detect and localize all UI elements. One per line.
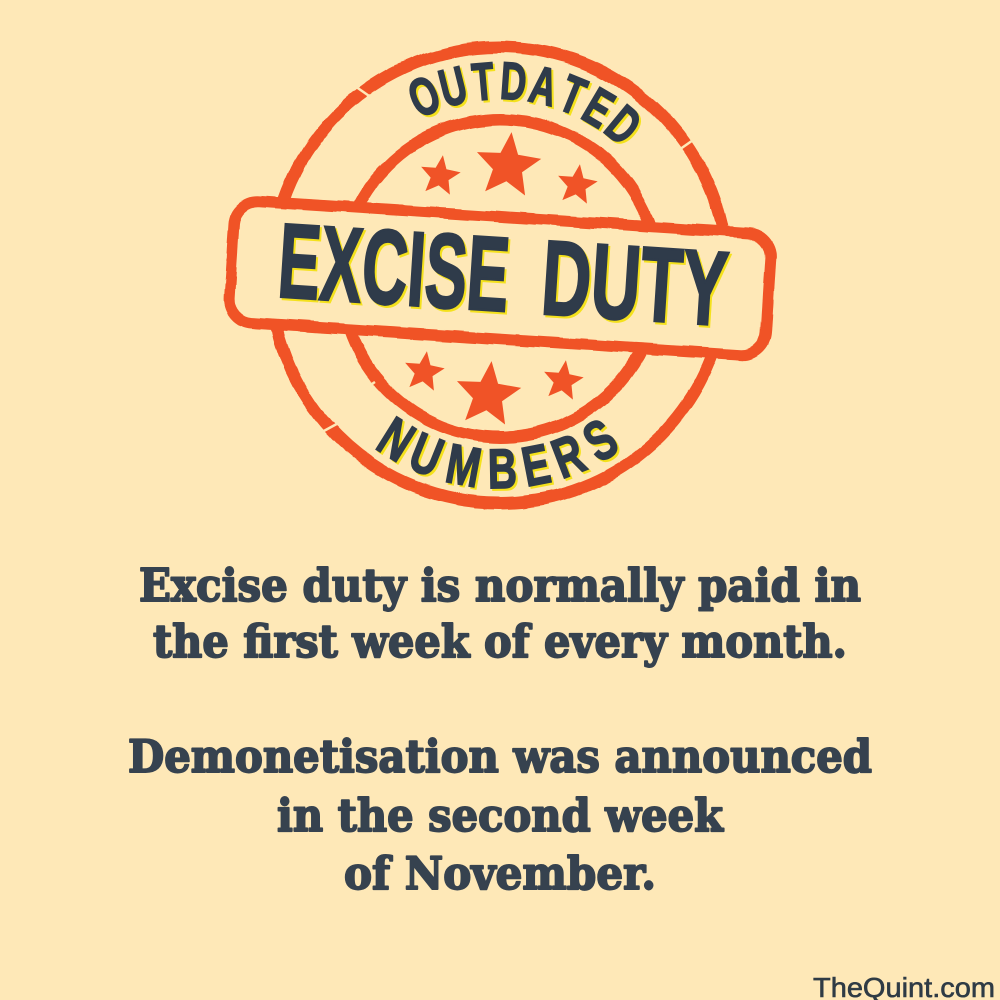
curved heading: NUMBERS: E: [519, 435, 557, 501]
curved heading: NUMBERS: R: [544, 423, 593, 491]
curved heading: NUMBERS: M: [443, 435, 488, 502]
curved heading: NUMBERS: R: [546, 425, 595, 493]
curved heading: OUTDATED: T: [470, 51, 497, 112]
curved heading: OUTDATED: E: [575, 78, 626, 142]
curved heading: OUTDATED: O: [402, 65, 451, 131]
curved heading: OUTDATED: [400, 51, 654, 158]
stars below the banner: [402, 348, 586, 426]
curved heading: NUMBERS: N: [367, 406, 425, 474]
curved heading: OUTDATED: D: [500, 53, 531, 114]
curved heading: OUTDATED: E: [573, 76, 624, 140]
body text: first paragraph: [139, 559, 861, 668]
curved heading: NUMBERS: S: [575, 410, 630, 476]
curved heading: NUMBERS: B: [487, 438, 517, 501]
curved heading: OUTDATED: U: [433, 55, 473, 119]
curved heading: NUMBERS: [367, 406, 630, 503]
curved heading: NUMBERS: M: [441, 433, 486, 500]
curved heading: NUMBERS: U: [403, 423, 453, 492]
curved heading: OUTDATED: D: [594, 94, 652, 156]
banner title: EXCISE DUTY: DUTY: [538, 219, 732, 349]
curved heading: OUTDATED: A: [524, 54, 563, 118]
curved heading: OUTDATED: T: [553, 65, 596, 129]
curved heading: OUTDATED: T: [472, 53, 499, 114]
ring wear marks: [322, 84, 696, 432]
stars above the banner: [418, 129, 600, 205]
outer ring: [271, 47, 727, 503]
body text: second paragraph: [128, 730, 872, 900]
curved heading: OUTDATED: A: [526, 56, 565, 120]
curved heading: NUMBERS: B: [489, 440, 519, 503]
body text: first paragraph: Excise duty is normally paid in: [139, 559, 861, 612]
banner title: EXCISE DUTY: EXCISE: [277, 204, 515, 337]
body text: second paragraph: Demonetisation was announced: [128, 730, 872, 783]
curved heading: NUMBERS: E: [517, 433, 555, 499]
curved heading: NUMBERS: U: [401, 421, 451, 490]
inner ring: [341, 119, 659, 437]
body text: second paragraph: of November.: [344, 847, 656, 900]
curved heading: OUTDATED: D: [498, 51, 529, 112]
curved heading: NUMBERS: N: [369, 408, 427, 476]
banner title: EXCISE DUTY: DUTY: [540, 221, 733, 351]
body text: second paragraph: in the second week: [277, 789, 724, 842]
banner title: EXCISE DUTY: EXCISE: [275, 202, 513, 334]
curved heading: NUMBERS: S: [573, 408, 628, 474]
curved heading: OUTDATED: U: [435, 57, 475, 121]
stamp badge: [228, 47, 772, 503]
banner frame: [228, 200, 772, 356]
curved heading: OUTDATED: O: [400, 63, 449, 129]
body text: first paragraph: the first week of every month.: [153, 615, 847, 668]
curved heading: OUTDATED: D: [596, 96, 654, 158]
curved heading: OUTDATED: T: [551, 63, 594, 127]
